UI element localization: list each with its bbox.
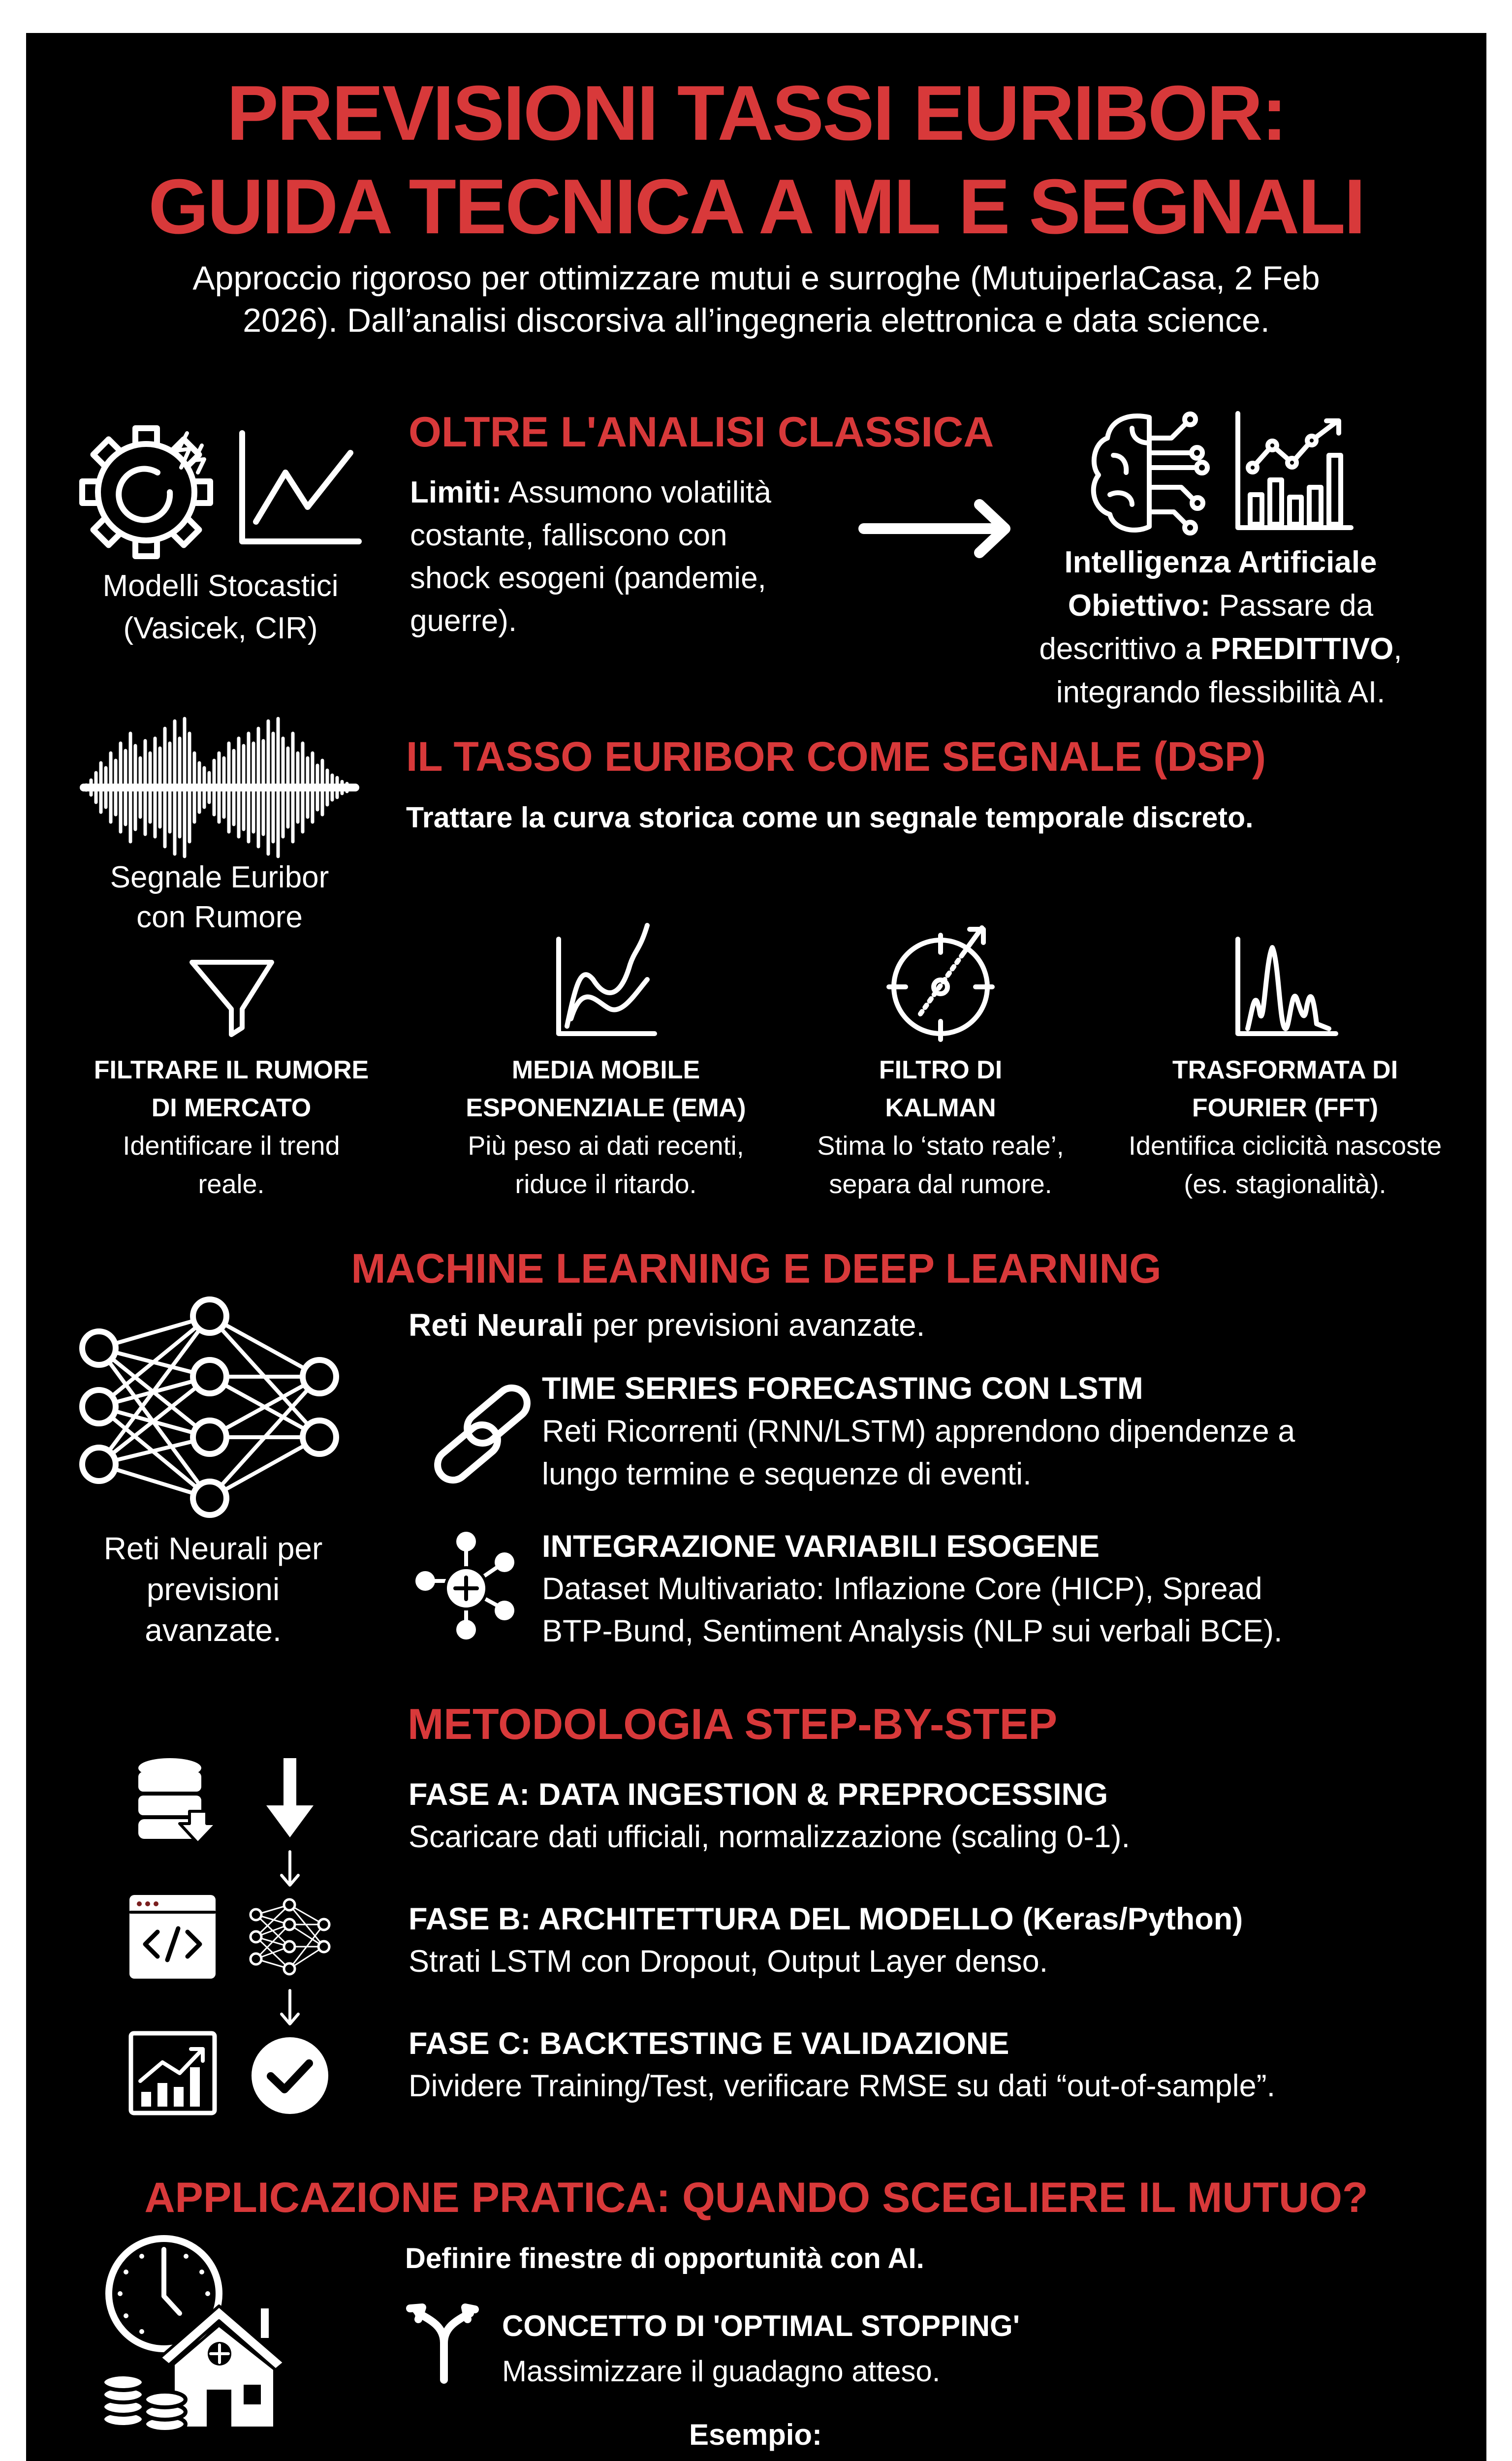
text: limiti: Limiti: Assumono volatilità [410, 475, 771, 509]
ml item: esogene: Dataset Multivariato: Inflazione Core (HICP), Spread [542, 1572, 1262, 1606]
label: reti neurali: avanzate. [145, 1612, 282, 1648]
text: intelligenza artificiale: integrando flessibilità AI. [1056, 675, 1385, 709]
icon: noisy waveform [84, 719, 355, 856]
phase A [409, 1777, 1130, 1854]
dsp item: EMA: ESPONENZIALE (EMA) [466, 1094, 746, 1122]
dsp item: filtrare: DI MERCATO [152, 1094, 311, 1122]
ml item: esogene [542, 1529, 1282, 1648]
section 5 heading: APPLICAZIONE PRATICA: QUANDO SCEGLIERE IL MUTUO? [144, 2174, 1368, 2221]
icon: FFT spectrum [1238, 939, 1336, 1034]
icon: database [138, 1758, 217, 1843]
optimal stopping: CONCETTO DI 'OPTIMAL STOPPING' [502, 2309, 1020, 2342]
label: reti neurali: Reti Neurali per [104, 1531, 322, 1566]
icon: bar chart [1238, 413, 1351, 528]
dsp item: kalman: KALMAN [885, 1094, 996, 1122]
label: segnale euribor [110, 860, 329, 934]
title: PREVISIONI TASSI EURIBOR: [227, 70, 1286, 157]
icon: small neural net [251, 1899, 329, 1974]
text: intelligenza artificiale: descrittivo a PREDITTIVO, [1039, 632, 1402, 666]
ml item: LSTM: Reti Ricorrenti (RNN/LSTM) apprendono dipendenze a [542, 1414, 1295, 1449]
arrow: big down [266, 1758, 314, 1837]
ml item: LSTM: lungo termine e sequenze di eventi. [542, 1457, 1032, 1491]
phase C: FASE C: BACKTESTING E VALIDAZIONE [409, 2026, 1009, 2061]
dsp item: fourier: TRASFORMATA DI [1172, 1056, 1398, 1084]
ml intro: Reti Neurali per previsioni avanzate. [409, 1307, 925, 1343]
text: intelligenza artificiale: Obiettivo: Passare da [1068, 589, 1373, 623]
label: modelli stocastici: (Vasicek, CIR) [123, 611, 318, 645]
section 3 heading: MACHINE LEARNING E DEEP LEARNING [351, 1245, 1161, 1292]
optimal stopping: Massimizzare il guadagno atteso. [502, 2355, 940, 2388]
text: intelligenza artificiale [1039, 545, 1402, 709]
phase C [409, 2026, 1275, 2103]
phase B [409, 1902, 1243, 1979]
label: reti neurali [104, 1531, 322, 1648]
icon: clock, house and coins [102, 2239, 284, 2432]
label: modelli stocastici: Modelli Stocastici [103, 569, 338, 603]
dsp item: EMA [466, 1056, 746, 1199]
ml item: esogene: INTEGRAZIONE VARIABILI ESOGENE [542, 1529, 1100, 1564]
esempio label: Esempio: [689, 2418, 822, 2451]
dsp item: fourier: (es. stagionalità). [1184, 1169, 1386, 1199]
dsp item: filtrare [94, 1056, 369, 1199]
text: limiti: costante, falliscono con [410, 518, 727, 552]
dsp item: filtrare: Identificare il trend [123, 1131, 340, 1161]
phase A: Scaricare dati ufficiali, normalizzazione (scaling 0-1). [409, 1820, 1130, 1854]
section 1 heading: OLTRE L'ANALISI CLASSICA [409, 409, 994, 456]
icon: kalman target [889, 928, 992, 1040]
icon: growth chart box [131, 2033, 215, 2113]
icon: gear [82, 428, 210, 556]
phase B: Strati LSTM con Dropout, Output Layer denso. [409, 1944, 1048, 1979]
icon: funnel [192, 962, 272, 1035]
dsp item: EMA: MEDIA MOBILE [512, 1056, 700, 1084]
app intro: Definire finestre di opportunità con AI. [405, 2242, 924, 2274]
icon: neural network [82, 1299, 336, 1515]
dsp item: fourier: Identifica ciclicità nascoste [1129, 1131, 1442, 1161]
text: limiti [410, 475, 771, 638]
icon: check circle [252, 2037, 328, 2114]
dsp item: filtrare: reale. [198, 1169, 265, 1199]
subtitle [192, 259, 1320, 339]
subtitle: 2026). Dall’analisi discorsiva all’ingegneria elettronica e data science. [243, 302, 1270, 339]
icon: code window [129, 1895, 216, 1979]
section 4 heading: METODOLOGIA STEP-BY-STEP [408, 1700, 1057, 1748]
ml item: LSTM [542, 1371, 1295, 1491]
text: intelligenza artificiale: Intelligenza Artificiale [1064, 545, 1377, 579]
icon: EMA chart [559, 925, 655, 1034]
title: GUIDA TECNICA A ML E SEGNALI [148, 163, 1364, 250]
dsp item: kalman: Stima lo ‘stato reale’, [817, 1131, 1064, 1161]
icon: hub [415, 1532, 514, 1640]
text: limiti: guerre). [410, 604, 517, 638]
icon: fork arrow [410, 2307, 475, 2380]
arrow: small down 1 [282, 1852, 298, 1885]
dsp item: fourier [1129, 1056, 1442, 1199]
icon: brain [1094, 414, 1207, 533]
dsp item: fourier: FOURIER (FFT) [1192, 1094, 1378, 1122]
section 2 heading: IL TASSO EURIBOR COME SEGNALE (DSP) [406, 733, 1266, 780]
label: segnale euribor: Segnale Euribor [110, 860, 329, 894]
dsp item: filtrare: FILTRARE IL RUMORE [94, 1056, 369, 1084]
ml item: LSTM: TIME SERIES FORECASTING CON LSTM [542, 1371, 1143, 1406]
icon: line chart [242, 433, 359, 541]
dsp item: kalman: FILTRO DI [879, 1056, 1002, 1084]
section 2 subtitle: Trattare la curva storica come un segnale temporale discreto. [406, 801, 1254, 834]
ml item: esogene: BTP-Bund, Sentiment Analysis (NLP sui verbali BCE). [542, 1614, 1282, 1648]
dsp item: kalman [817, 1056, 1064, 1199]
dsp item: EMA: riduce il ritardo. [515, 1169, 697, 1199]
label: modelli stocastici [103, 569, 338, 645]
label: segnale euribor: con Rumore [136, 900, 303, 934]
label: reti neurali: previsioni [147, 1572, 280, 1607]
dsp item: EMA: Più peso ai dati recenti, [468, 1131, 744, 1161]
title [148, 70, 1364, 250]
phase C: Dividere Training/Test, verificare RMSE su dati “out-of-sample”. [409, 2069, 1275, 2103]
arrow: small down 2 [282, 1990, 298, 2024]
dsp item: kalman: separa dal rumore. [829, 1169, 1052, 1199]
text: limiti: shock esogeni (pandemie, [410, 561, 766, 595]
arrow: right [864, 505, 1005, 553]
subtitle: Approccio rigoroso per ottimizzare mutui e surroghe (MutuiperlaCasa, 2 Feb [192, 259, 1320, 297]
icon: chain link [431, 1382, 534, 1486]
optimal stopping [502, 2309, 1020, 2388]
phase B: FASE B: ARCHITETTURA DEL MODELLO (Keras/Python) [409, 1902, 1243, 1936]
phase A: FASE A: DATA INGESTION & PREPROCESSING [409, 1777, 1108, 1812]
